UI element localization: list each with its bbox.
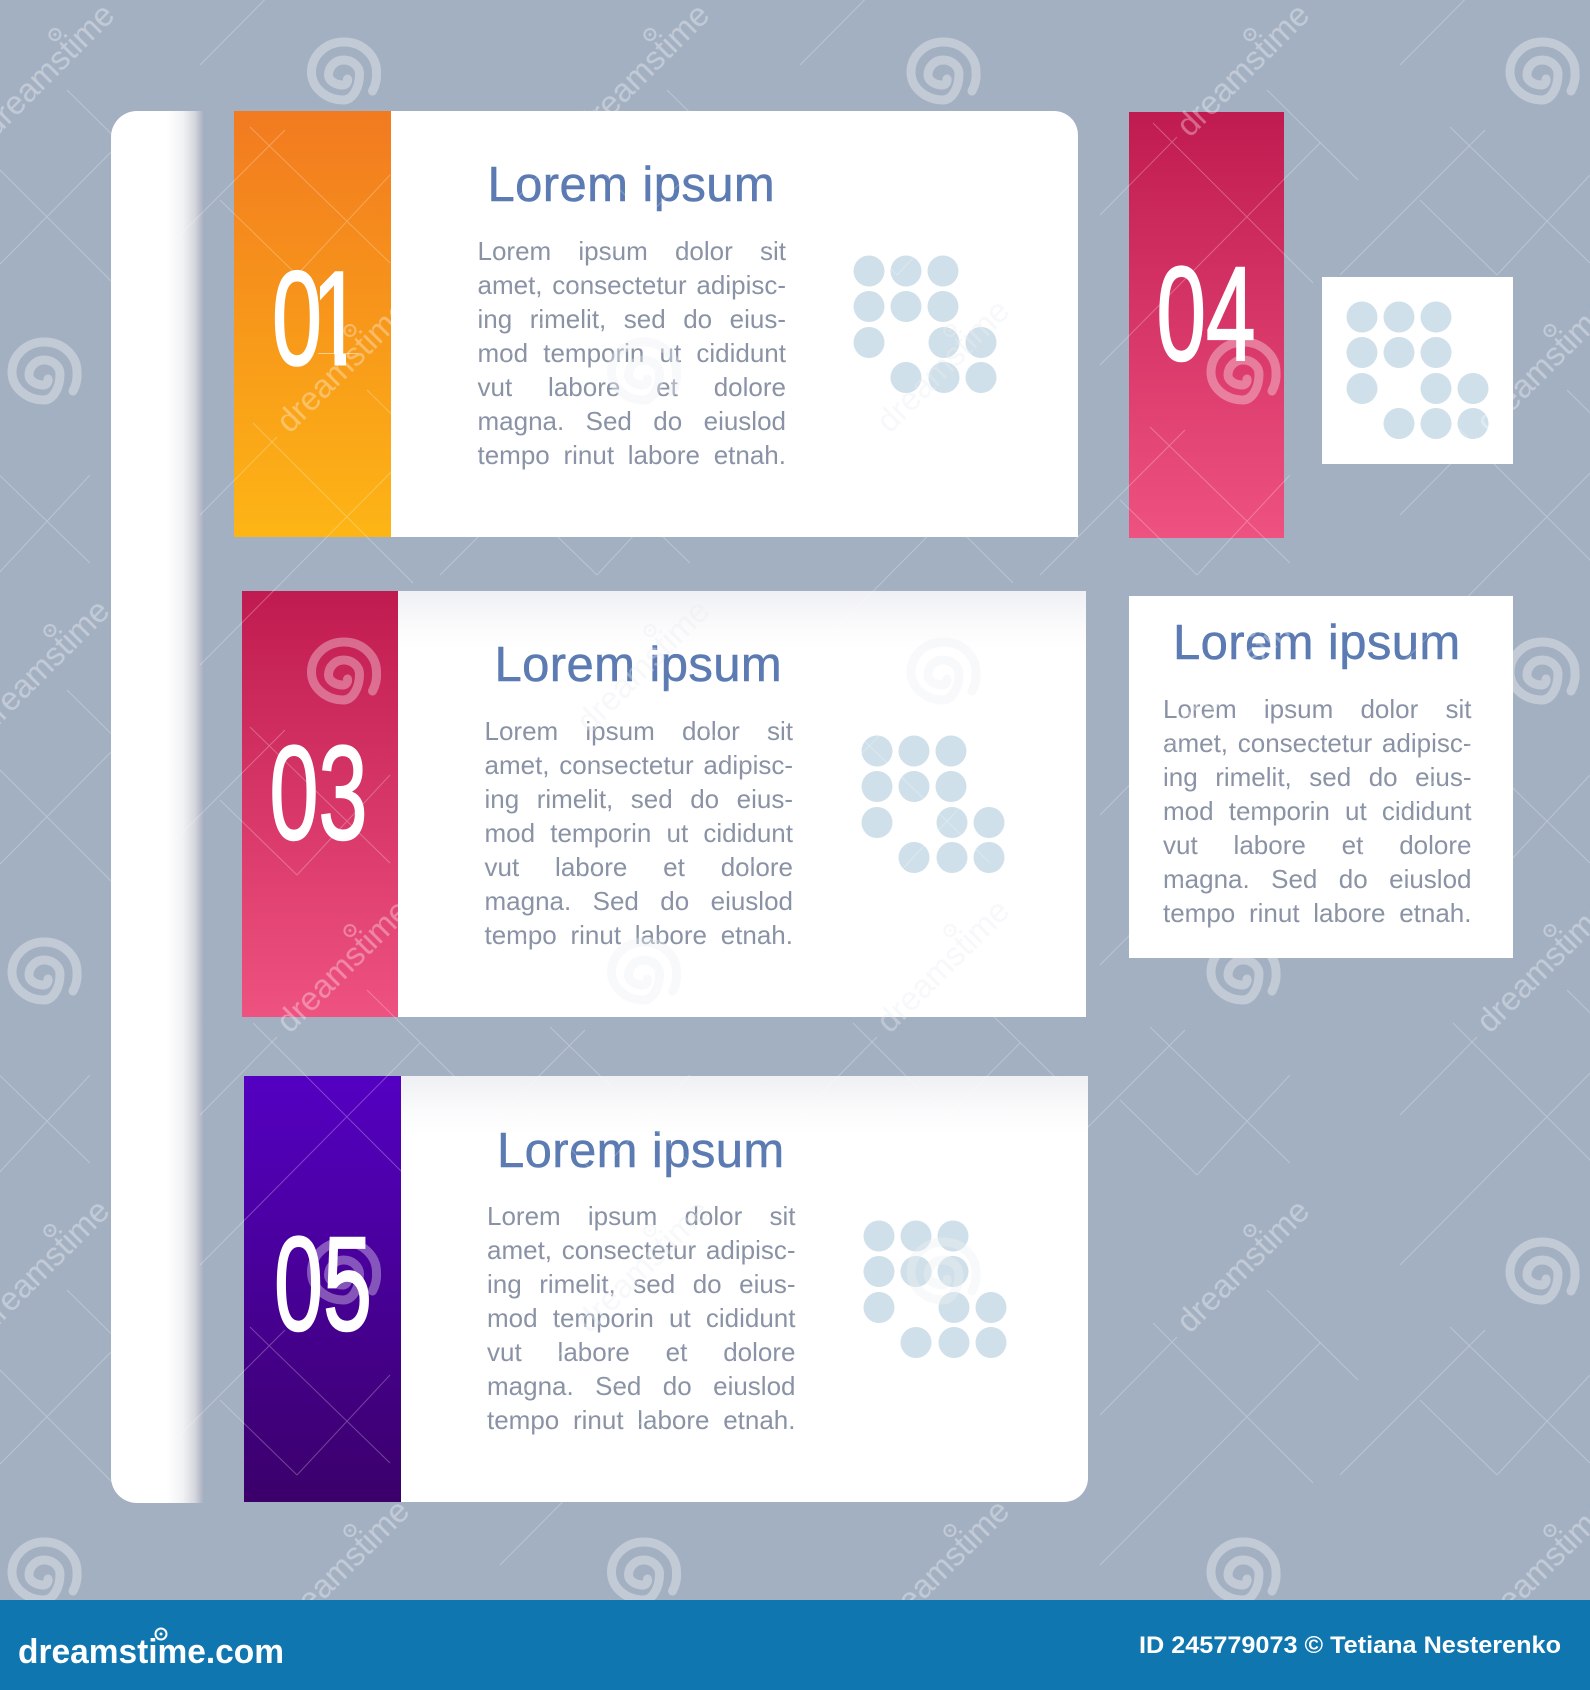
number bar 01: 0 — [272, 244, 322, 393]
body text — [487, 1201, 796, 1435]
body text: ing rimelit, sed do eius- — [484, 784, 793, 814]
number bar 04: 04 — [1156, 240, 1255, 389]
body text: amet, consectetur adipisc- — [484, 750, 793, 780]
panel: card 03 — [242, 591, 1086, 1017]
logo wordmark: dreamstime.com — [18, 1633, 284, 1671]
body text: vut labore et dolore — [1163, 830, 1472, 860]
number bar 05 — [244, 1076, 400, 1502]
panel: dot grid square — [1322, 277, 1513, 464]
body text: magna. Sed do eiuslod — [1163, 864, 1472, 894]
body text: magna. Sed do eiuslod — [487, 1371, 796, 1401]
body text: Lorem ipsum dolor sit — [1163, 694, 1472, 724]
body text — [1163, 694, 1472, 928]
body text: amet, consectetur adipisc- — [487, 1235, 796, 1265]
body text: tempo rinut labore etnah. — [484, 920, 793, 950]
body text: Lorem ipsum dolor sit — [484, 716, 793, 746]
left white rounded strip — [111, 110, 203, 1502]
panel: card 04 text — [1128, 596, 1513, 958]
footer banner — [0, 1600, 1590, 1690]
body text: vut labore et dolore — [478, 372, 786, 402]
icon: dot grid — [854, 256, 996, 393]
icon: dot grid — [864, 1220, 1006, 1358]
body text: amet, consectetur adipisc- — [1163, 728, 1472, 758]
body text: mod temporin ut cididunt — [487, 1303, 796, 1333]
body text: vut labore et dolore — [487, 1337, 796, 1367]
body text: mod temporin ut cididunt — [484, 818, 793, 848]
body text: magna. Sed do eiuslod — [484, 886, 793, 916]
body text: ing rimelit, sed do eius- — [478, 304, 786, 334]
body text: Lorem ipsum dolor sit — [487, 1201, 796, 1231]
body text: ing rimelit, sed do eius- — [1163, 762, 1472, 792]
body text: tempo rinut labore etnah. — [1163, 898, 1472, 928]
body text — [478, 236, 786, 470]
body text: amet, consectetur adipisc- — [478, 270, 786, 300]
body text: tempo rinut labore etnah. — [478, 440, 786, 470]
body text — [484, 716, 793, 950]
panel: card 05 — [244, 1076, 1088, 1502]
heading: Lorem ipsum — [1173, 616, 1461, 670]
heading: Lorem ipsum — [494, 638, 782, 692]
body text: ing rimelit, sed do eius- — [487, 1269, 796, 1299]
body text: Lorem ipsum dolor sit — [478, 236, 786, 266]
number bar 05: 05 — [274, 1210, 372, 1359]
heading: Lorem ipsum — [497, 1124, 785, 1178]
panel: card 01 — [234, 110, 1078, 537]
image credit: ID 245779073 © Tetiana Nesterenko — [1139, 1632, 1561, 1659]
body text: mod temporin ut cididunt — [478, 338, 786, 368]
number bar 01 — [234, 110, 390, 537]
number bar 03: 03 — [269, 719, 367, 868]
icon: dot grid — [1346, 302, 1488, 439]
body text: tempo rinut labore etnah. — [487, 1405, 796, 1435]
body text: mod temporin ut cididunt — [1163, 796, 1472, 826]
body text: vut labore et dolore — [484, 852, 793, 882]
number bar 04 — [1128, 112, 1284, 538]
number bar 01: 1 — [312, 244, 362, 393]
icon: dot grid — [862, 736, 1004, 873]
heading: Lorem ipsum — [488, 158, 775, 212]
number bar 03 — [242, 591, 398, 1017]
body text: magna. Sed do eiuslod — [478, 406, 786, 436]
